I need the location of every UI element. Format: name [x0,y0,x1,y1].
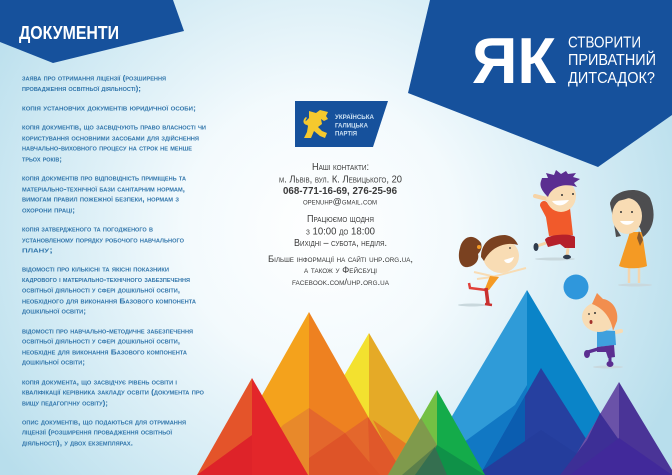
title word: how: ЯК [472,24,556,97]
illustration: small boy [582,293,623,368]
logo text [335,113,374,138]
text block: documents list: заява про отримання ліцензії (розширення [22,74,166,82]
illustration: boy with purple hair [534,170,580,260]
text block: contacts: 068-771-16-69, 276-25-96 [283,185,397,197]
text block: documents list: дошкільної освіти; [22,306,86,316]
text block: contacts: facebook.com/uhp.org.ua [292,277,389,287]
mountain: blue [417,290,637,475]
text block: documents list: матеріально-технічної бази санітарним нормам, [22,184,185,194]
title continuation: СТВОРИТИ [568,34,641,52]
title continuation: ДИТСАДОК? [568,70,655,87]
banner: documents heading [0,0,184,63]
title continuation: ПРИВАТНИЙ [568,51,656,69]
text block: contacts: м. Львів, вул. К. Левицького, 20 [279,174,402,186]
text block: contacts: з 10:00 до 18:00 [306,226,375,238]
text block: documents list: установленому порядку робочого навчального [22,236,184,244]
mountain: red [197,378,308,475]
banner: main title [408,0,672,167]
text block: documents list: ліцензії (розширення провадження освітньої [22,428,173,436]
text block: documents list: плану; [22,246,53,254]
text block: contacts: Більше інформації на сайті uhp.org.ua, [268,254,413,264]
text block: documents list: трьох років; [22,154,62,164]
text block: contacts: Вихідні – субота, неділя. [294,238,387,249]
text block: contacts: Наші контакти: [312,162,369,173]
title continuation [568,34,656,87]
logo text: УКРАЇНСЬКА [335,113,374,121]
illustration: girl with ponytail [458,235,526,306]
text block: documents list: провадження освітньої діяльності); [22,84,141,93]
text block: documents list: освітньої діяльності у сфері дошкільної освіти, [22,286,180,294]
illustration: mountains [197,290,672,475]
text block: documents list: копія документів, що засвідчують право власності чи [22,122,206,132]
mountain: orange [217,312,401,475]
text block: documents list [22,74,206,448]
text block: documents list: необхідне для виконання Базового компонента [22,348,187,356]
text block: documents list: копія затвердженого та погодженого в [22,224,153,234]
text block: documents list: вимогам правил пожежної безпеки, нормам з [22,194,179,204]
mountain: purple [560,382,672,475]
text block: documents list: вищу педагогічну освіту); [22,398,108,408]
logo text: ГАЛИЦЬКА [335,122,368,130]
text block: contacts [268,162,413,287]
illustration: girl in orange dress [610,190,654,286]
logo text: ПАРТІЯ [335,130,357,138]
text block: documents list: копія документів про відповідність приміщень та [22,174,186,182]
text block: contacts: openuhp@gmail.com [303,196,377,206]
mountain: navy [480,368,609,475]
text block: documents list: необхідного для виконання Базового компонента [22,296,196,306]
heading: documents: ДОКУМЕНТИ [19,23,119,43]
text block: documents list: копія документа, що засвідчує рівень освіти і [22,378,178,386]
text block: documents list: охорони праці; [22,206,75,214]
text block: documents list: навчально-виховного процесу на строк не менше [22,144,193,152]
text block: documents list: копія установчих документів юридичної особи; [22,104,196,112]
logo: Ukrainian Galician Party [295,101,388,147]
mountain: yellow [286,333,452,475]
text block: documents list: опис документів, що подаються для отримання [22,418,186,426]
text block: documents list: дошкільної освіти; [22,358,85,366]
text block: documents list: кадрового і матеріально-технічного забезпечення [22,275,190,284]
text block: contacts: а також у Фейсбуці [304,265,377,275]
text block: contacts: Працюємо щодня [307,214,374,225]
mountain: green [388,390,485,475]
text block: documents list: освітньої діяльності у сфері дошкільної освіти, [22,336,180,346]
text block: documents list: відомості про навчально-методичне забезпечення [22,326,193,336]
text block: documents list: відомості про кількісні та якісні показники [22,264,169,274]
text block: documents list: користування основними засобами для здійснення [22,134,199,142]
text block: documents list: діяльності), у двох екземплярах. [22,438,133,448]
icon: golden lion [304,110,328,138]
text block: documents list: кваліфікації керівника закладу освіти (документа про [22,388,204,396]
illustration: blue ball [564,274,588,300]
